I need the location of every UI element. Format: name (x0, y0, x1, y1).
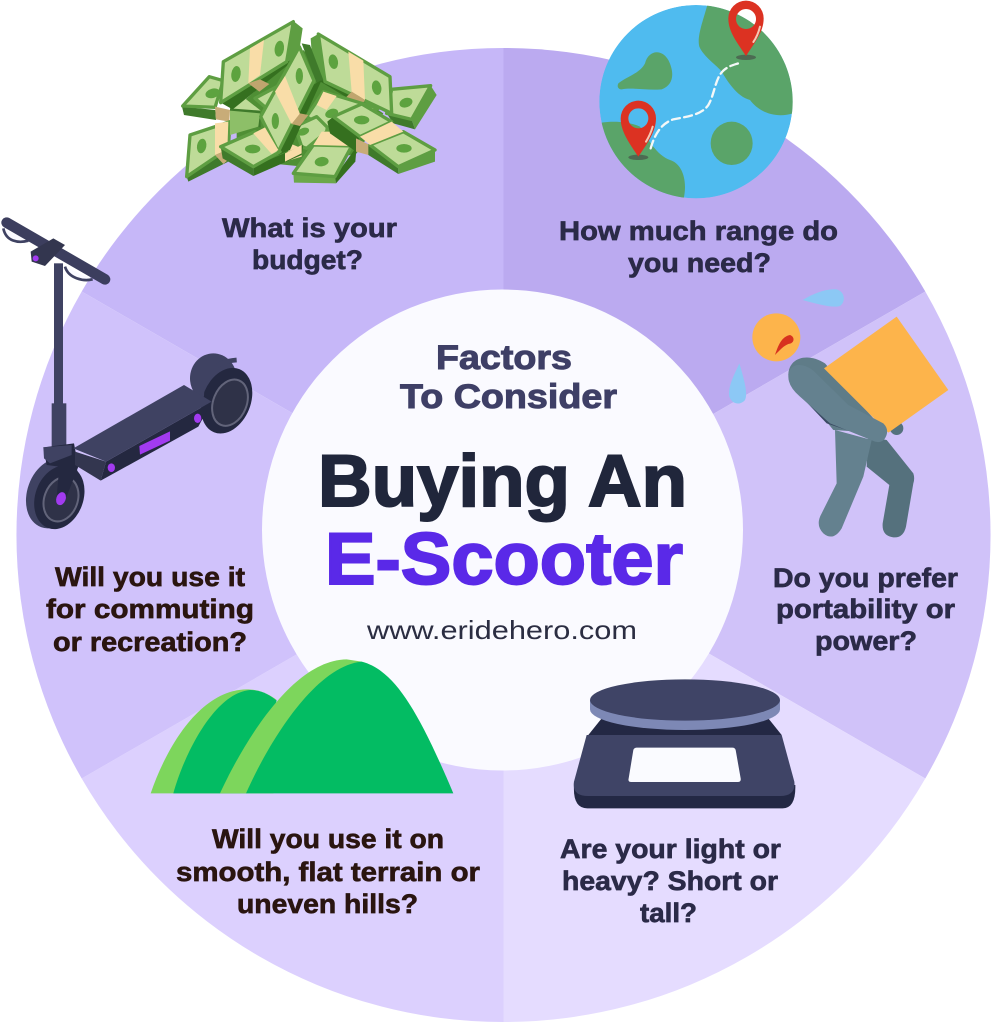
label: rider size: Are your light or (560, 834, 781, 864)
icon: electric scooter (3, 223, 262, 536)
sweat drops (803, 289, 844, 307)
label: range: you need? (628, 248, 771, 278)
segment: usage (16, 292, 504, 778)
front right long bundle (327, 117, 360, 152)
map pin: destination (728, 1, 764, 60)
rear fender and wheel (190, 353, 262, 441)
label: budget (222, 213, 397, 275)
label: budget: What is your (222, 213, 397, 243)
label: usage (46, 562, 254, 657)
label: portability: Do you prefer (773, 563, 958, 593)
label: usage: for commuting (46, 594, 254, 624)
segment: budget (82, 48, 503, 535)
map pin: origin (621, 101, 656, 160)
icon: globe with route pins (597, 0, 803, 200)
arm (788, 365, 887, 442)
main title line: Buying An (318, 441, 687, 522)
left middle bundle (182, 107, 216, 120)
icon: person carrying heavy box (729, 289, 948, 537)
center hub circle (262, 290, 743, 770)
title block (318, 339, 687, 645)
subtitle (400, 339, 617, 416)
icon: pile of money (182, 21, 437, 183)
box (824, 317, 948, 433)
front left lying bundle (221, 147, 253, 176)
label: terrain: uneven hills? (237, 889, 418, 919)
segment: terrain (82, 535, 503, 1022)
handlebar (3, 223, 105, 280)
globe (597, 0, 803, 200)
label: terrain: Will you use it on (212, 824, 444, 854)
icon: green hills (151, 659, 453, 793)
pile backing (237, 50, 383, 167)
label: terrain (176, 824, 480, 919)
label: terrain: smooth, flat terrain or (176, 857, 480, 887)
label: usage: or recreation? (53, 627, 247, 657)
stem (54, 263, 63, 407)
icon: weighing scale (574, 679, 795, 808)
label: rider size: heavy? Short or (562, 866, 778, 896)
torso (788, 357, 887, 433)
label: range (559, 216, 838, 278)
scale body (574, 735, 794, 796)
label: rider size (560, 834, 781, 928)
head (752, 313, 800, 361)
segment: range (504, 48, 925, 535)
center lying bundles (255, 87, 287, 108)
platter (590, 700, 780, 730)
scale base (574, 785, 795, 808)
dashed route (651, 63, 738, 148)
hand (890, 422, 903, 435)
label: rider size: tall? (640, 898, 697, 928)
front center bundle (293, 173, 336, 183)
front leg (819, 430, 872, 537)
label: portability: power? (815, 626, 917, 656)
deck (73, 385, 212, 481)
label: budget: budget? (252, 245, 363, 275)
back leg (867, 437, 914, 537)
subtitle: Factors (436, 339, 572, 377)
center upright bundle (302, 43, 323, 83)
top right bundle (311, 34, 325, 82)
label: range: How much range do (559, 216, 838, 246)
scale neck (588, 718, 782, 735)
label: portability: portability or (776, 594, 955, 624)
far right bundle (387, 113, 415, 129)
label: usage: Will you use it (55, 562, 245, 592)
segment: rider weight (504, 535, 925, 1022)
top left bundle (287, 21, 303, 62)
segment: portability (504, 292, 991, 778)
subtitle: To Consider (400, 378, 617, 416)
front wheel and fork (17, 443, 93, 536)
display (628, 748, 741, 782)
website: www.eridehero.com (366, 615, 637, 645)
lower left bundle (187, 155, 228, 182)
highlighted title line: E-Scooter (325, 519, 683, 600)
label: portability (773, 563, 958, 656)
